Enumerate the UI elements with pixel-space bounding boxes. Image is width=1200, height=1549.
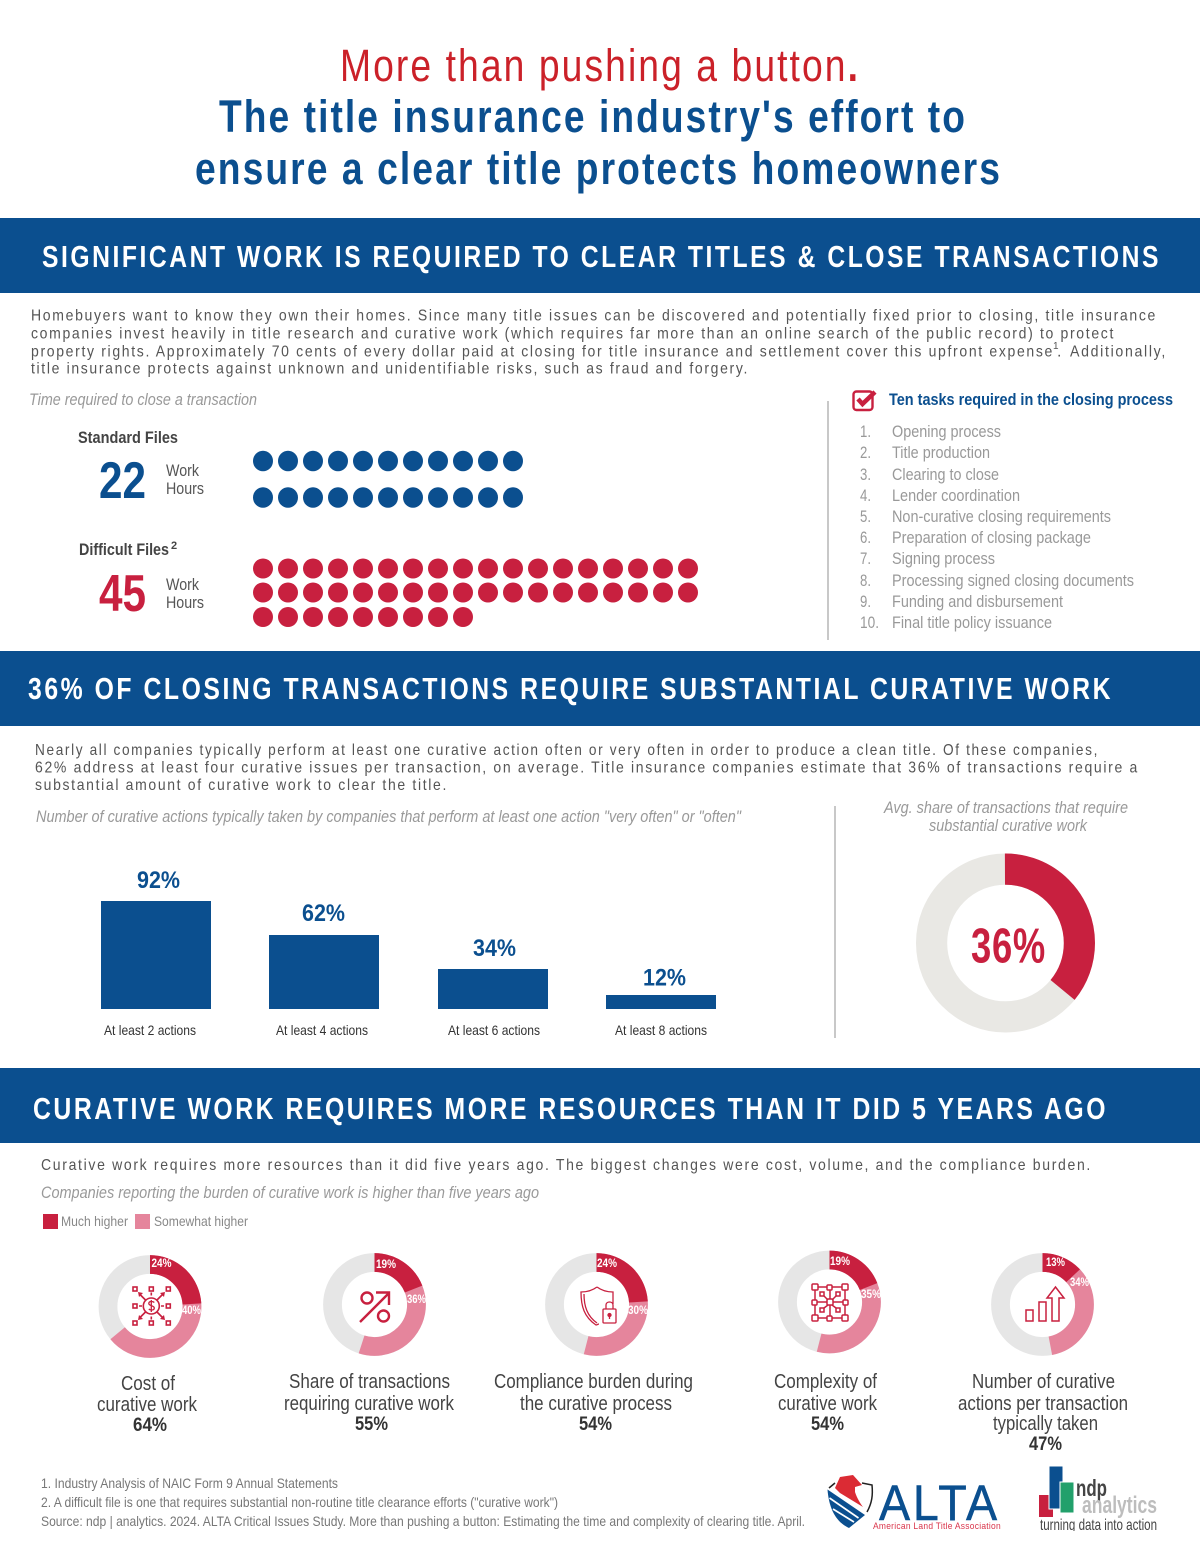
task list: 6. (860, 528, 871, 547)
bar: at least 8: At least 8 actions (615, 1022, 707, 1038)
bar: at least 4: At least 4 actions (276, 1022, 368, 1038)
bar chart (101, 867, 716, 1038)
label: cost: Cost of (121, 1373, 175, 1395)
panel: standard files: 22 (99, 452, 146, 510)
donut: compliance (554, 1258, 648, 1346)
bar: at least 4: 62% (302, 900, 345, 927)
task list: 4. (860, 486, 871, 505)
bar: at least 6: At least 6 actions (448, 1022, 540, 1038)
label: number of actions: Number of curative (972, 1371, 1115, 1393)
label: share: Share of transactions (289, 1371, 450, 1393)
task list: 10. (860, 613, 879, 632)
logo: ndp analytics: turning data into action (1040, 1517, 1157, 1534)
task list: Clearing to close (892, 465, 999, 484)
panel: ten tasks (854, 390, 1173, 632)
donut caption: Avg. share of transactions that require (883, 798, 1128, 817)
task list (860, 422, 1134, 632)
bar: at least 2: At least 2 actions (104, 1022, 196, 1038)
title (195, 40, 1002, 194)
label: number of actions: typically taken (993, 1413, 1098, 1435)
logo: ndp analytics: analytics (1082, 1492, 1157, 1519)
donut: complexity (788, 1256, 881, 1344)
bar: at least 8: 12% (643, 964, 686, 992)
label: share (284, 1371, 455, 1435)
panel: difficult files: 2 (171, 540, 177, 552)
legend: Much higher (61, 1213, 128, 1229)
intro paragraph: . (1057, 344, 1063, 360)
task list: 3. (860, 465, 871, 484)
task list: Non-curative closing requirements (892, 507, 1111, 526)
panel: cost of curative work (97, 1258, 201, 1436)
bar: at least 8 (606, 964, 716, 1038)
label: compliance: the curative process (520, 1393, 672, 1415)
logo: ndp analytics: ndp (1076, 1475, 1107, 1501)
icon: dollar network (133, 1287, 170, 1325)
label: complexity: curative work (778, 1393, 878, 1415)
label: cost: 64% (133, 1415, 167, 1436)
banner: significant work (0, 218, 1200, 293)
footnotes (41, 1475, 805, 1529)
logo: ALTA: American Land Title Association (873, 1521, 1001, 1532)
label: compliance: 54% (579, 1414, 612, 1435)
footnotes: 1. Industry Analysis of NAIC Form 9 Annual Statements (41, 1475, 338, 1491)
label: cost (97, 1373, 198, 1436)
donut chart: 36 percent (932, 869, 1079, 1017)
task list: 1. (860, 422, 871, 441)
donut caption: substantial curative work (929, 816, 1088, 835)
donut: complexity: 35% (861, 1289, 881, 1301)
donut: complexity: 19% (830, 1256, 850, 1268)
dots: 22 hours (253, 451, 523, 508)
panel: share of transactions (284, 1259, 455, 1435)
donut chart: 36 percent: 36% (971, 920, 1046, 974)
bar: at least 6: 34% (473, 935, 516, 962)
label: complexity: Complexity of (774, 1371, 877, 1393)
donut: cost: 40% (182, 1305, 201, 1317)
title: More than pushing a button. (340, 40, 860, 91)
logo: ALTA (828, 1475, 1001, 1532)
panel: difficult files: 45 (99, 565, 146, 623)
banner: more resources (0, 1068, 1200, 1143)
icon: network grid (812, 1284, 848, 1321)
label: complexity: 54% (811, 1414, 844, 1435)
task list: Signing process (892, 549, 995, 568)
label: compliance: Compliance burden during (494, 1371, 693, 1393)
intro paragraph (31, 308, 1167, 378)
donut: cost: 24% (152, 1258, 172, 1270)
panel: standard files: Standard Files (78, 428, 178, 447)
panel: number of curative actions (958, 1257, 1128, 1455)
task list: 9. (860, 592, 871, 611)
panel: difficult files: Difficult Files (79, 540, 169, 559)
bar: at least 2: 92% (137, 867, 180, 894)
label: cost: curative work (97, 1394, 198, 1416)
task list: 2. (860, 443, 871, 462)
title: The title insurance industry's effort to (219, 91, 967, 142)
intro paragraph: Additionally, (1070, 344, 1167, 360)
bar: at least 2 (101, 867, 211, 1038)
logo: ALTA: ALTA (879, 1475, 1000, 1531)
label: number of actions: actions per transaction (958, 1393, 1128, 1415)
icon: ALTA shield (828, 1475, 872, 1528)
footnotes: 2. A difficult file is one that requires substantial non-routine title clearance efforts ("curative work") (41, 1494, 558, 1510)
time required caption: Time required to close a transaction (29, 390, 257, 409)
task list: 5. (860, 507, 871, 526)
panel: standard files: Hours (166, 479, 204, 498)
intro paragraph: 1 (1053, 341, 1059, 352)
banner: 36 percent (0, 651, 1200, 726)
title: ensure a clear title protects homeowners (195, 143, 1002, 194)
icon: shield with lock (581, 1287, 616, 1325)
donut: number of actions: 34% (1070, 1277, 1089, 1289)
icon: percent with arrow (360, 1292, 389, 1322)
donut: cost (108, 1258, 201, 1348)
panel: difficult files: Work (166, 575, 199, 594)
footnotes: Source: ndp | analytics. 2024. ALTA Critical Issues Study. More than pushing a button: Estimating the time and complexity of clearing title. April. (41, 1513, 805, 1529)
legend: Somewhat higher (154, 1213, 248, 1229)
label: number of actions (958, 1371, 1128, 1455)
donut: share: 36% (407, 1294, 426, 1306)
donut: number of actions (1000, 1257, 1089, 1346)
task list: Preparation of closing package (892, 528, 1091, 547)
intro paragraph: title insurance protects against unknown and unidentifiable risks, such as fraud and forgery. (31, 360, 749, 378)
panel: standard files (78, 428, 523, 510)
bar: at least 4 (269, 900, 379, 1038)
task list: Processing signed closing documents (892, 571, 1134, 590)
dots: 45 hours (253, 558, 698, 627)
panel: complexity (774, 1256, 881, 1435)
label: number of actions: 47% (1029, 1434, 1062, 1455)
task list: Funding and disbursement (892, 592, 1063, 611)
label: complexity (774, 1371, 878, 1435)
bar: at least 6 (438, 935, 548, 1038)
panel: standard files: Work (166, 461, 199, 480)
curative paragraph (35, 742, 1139, 794)
panel: difficult files (79, 540, 698, 627)
donut: share: 19% (376, 1259, 396, 1271)
legend (43, 1213, 248, 1229)
task list: Final title policy issuance (892, 613, 1052, 632)
icon: bars with arrow (1026, 1287, 1064, 1321)
donut: compliance: 24% (597, 1258, 617, 1270)
donut: number of actions: 13% (1046, 1257, 1065, 1269)
panel: difficult files: Hours (166, 593, 204, 612)
intro paragraph: property rights. Approximately 70 cents of every dollar paid at closing for title insurance and settlement cover this upfront expense (31, 344, 1054, 360)
bar chart caption: Number of curative actions typically taken by companies that perform at least one action "very often" or "often" (36, 807, 742, 826)
companies caption: Companies reporting the burden of curative work is higher than five years ago (41, 1183, 539, 1202)
task list: 8. (860, 571, 871, 590)
task list: Title production (892, 443, 990, 462)
donut caption (883, 798, 1128, 835)
label: compliance (494, 1371, 693, 1435)
task list: 7. (860, 549, 871, 568)
panel: compliance burden (494, 1258, 693, 1435)
label: share: 55% (355, 1414, 388, 1435)
icon: checkbox (854, 392, 875, 410)
task list: Opening process (892, 422, 1001, 441)
label: share: requiring curative work (284, 1393, 455, 1415)
donut: share (332, 1259, 426, 1346)
task list: Lender coordination (892, 486, 1020, 505)
donut: compliance: 30% (628, 1305, 648, 1317)
curative paragraph: substantial amount of curative work to clear the title. (35, 777, 448, 794)
logo: ndp analytics (1039, 1466, 1157, 1534)
